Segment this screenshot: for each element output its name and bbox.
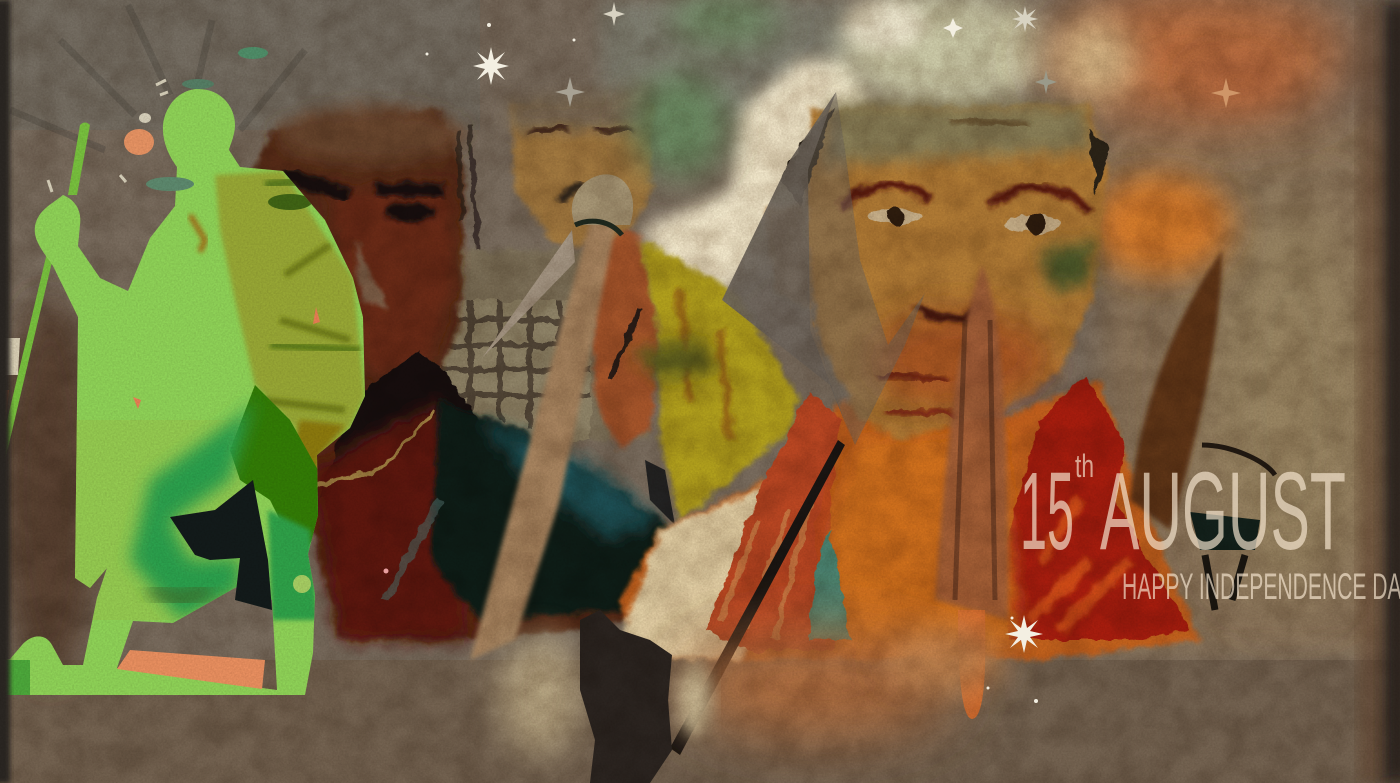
stars [384, 2, 1241, 703]
right insignia lines [1190, 445, 1275, 610]
grey silhouette overlay on right man [722, 92, 925, 445]
centre spear blade with drip [935, 265, 1008, 719]
yellow cloth [630, 240, 800, 520]
Gandhi silhouette in green [0, 80, 380, 700]
central figure: staff and sickle [470, 174, 675, 660]
faint spinning wheel rays [10, 5, 305, 150]
right knife [1130, 250, 1222, 530]
man left: head and torso [240, 105, 670, 640]
orange smoke top right [1050, 0, 1350, 277]
lower smoke [498, 630, 1005, 755]
right man: scarf, chest and face [620, 100, 1200, 660]
orange and white paint splashes [0, 47, 320, 689]
black stick [670, 440, 845, 755]
title: 15th August: 15 [1020, 450, 1074, 573]
black map silhouette [580, 610, 672, 783]
title superscript: th [1075, 448, 1094, 484]
dark shirt gap [170, 480, 272, 610]
title: 15th August [1020, 448, 1400, 607]
star [473, 47, 509, 85]
background figure: man in the back [430, 85, 660, 450]
cloud: white smoke behind central man [632, 0, 1050, 290]
walking stick [0, 122, 90, 465]
